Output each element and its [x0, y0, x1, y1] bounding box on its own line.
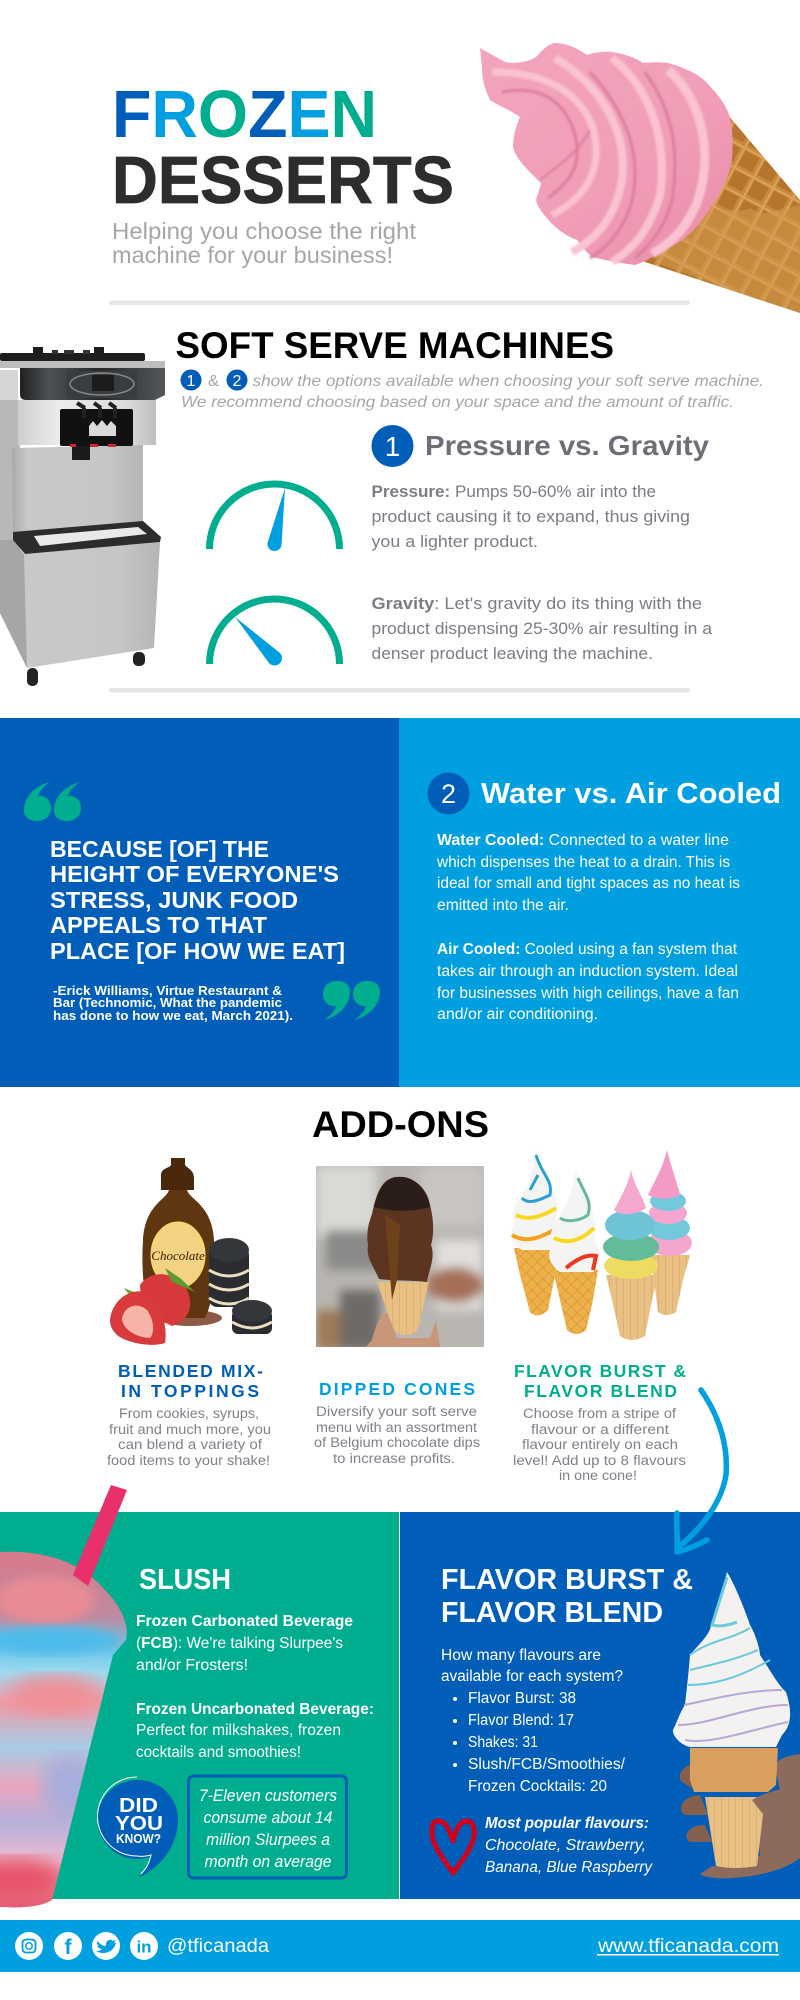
quote attribution: has done to how we eat, March 2021).	[53, 1009, 293, 1023]
subtitle: Helping you choose the right	[112, 218, 417, 244]
heading: Water vs. Air Cooled	[428, 772, 781, 814]
column: blended mix-in toppings: can blend a variety of	[118, 1437, 262, 1452]
column: blended mix-in toppings: IN TOPPINGS	[121, 1381, 259, 1401]
column: dipped cones: to increase profits.	[333, 1451, 455, 1466]
icon: instagram	[15, 1932, 43, 1960]
column: dipped cones: menu with an assortment	[316, 1420, 477, 1435]
text: air cooled: takes air through an induction system. Ideal	[437, 963, 738, 980]
section 1 heading: Pressure vs. Gravity: Pressure vs. Gravity	[425, 430, 709, 461]
section 1 heading: Pressure vs. Gravity: 1	[385, 431, 400, 462]
text: flavours per system: Flavor Burst: 38	[468, 1690, 576, 1707]
title: Frozen Desserts: DESSERTS	[112, 143, 454, 218]
text: slush descriptions: Frozen Carbonated Beverage	[136, 1613, 353, 1630]
quote text: PLACE [OF HOW WE EAT]	[50, 938, 345, 964]
heading: Flavor Burst & Flavor Blend	[441, 1564, 693, 1629]
text: gravity	[372, 595, 713, 663]
column: flavor burst and flavor blend: in one cone!	[559, 1468, 637, 1483]
heading: Flavor Burst & Flavor Blend: FLAVOR BURST &	[441, 1564, 693, 1596]
heading: Soft Serve Machines: SOFT SERVE MACHINES	[176, 325, 614, 366]
badge: did you know	[97, 1777, 178, 1877]
text: gravity: Gravity : Let's gravity do its thing with the	[372, 595, 702, 613]
callout: 7-Eleven fact: consume about 14	[204, 1809, 332, 1827]
callout: 7-Eleven fact: month on average	[204, 1853, 332, 1871]
panel: water vs air cooled	[399, 718, 800, 1087]
column: flavor burst and flavor blend: flavour or a different	[531, 1422, 669, 1437]
heading: Add-ons: ADD-ONS	[312, 1104, 489, 1145]
text: flavours per system: How many flavours are	[441, 1647, 601, 1664]
column: blended mix-in toppings	[107, 1361, 271, 1468]
footer bar	[0, 1920, 800, 1972]
column: flavor burst and flavor blend: level! Add up to 8 flavours	[513, 1453, 686, 1468]
text: flavours per system: available for each system?	[441, 1668, 623, 1685]
intro text with number badges: 1	[187, 373, 196, 390]
quote text	[50, 836, 345, 964]
text: most popular flavours: Chocolate, Strawberry,	[485, 1837, 646, 1854]
column: flavor burst and flavor blend: Choose from a stripe of	[523, 1406, 676, 1421]
text: flavours per system: Shakes: 31	[468, 1734, 538, 1751]
text: slush descriptions: Frozen Uncarbonated Beverage:	[136, 1701, 374, 1718]
quote attribution: -Erick Williams, Virtue Restaurant &	[53, 984, 282, 998]
panel: flavor burst and flavor blend	[400, 1512, 800, 1899]
divider	[109, 688, 690, 692]
text: water cooled: Water Cooled: Connected to a water line	[437, 832, 729, 849]
text: water cooled: which dispenses the heat to a drain. This is	[436, 854, 730, 871]
quote text: STRESS, JUNK FOOD	[50, 887, 298, 913]
text: water cooled: emitted into the air.	[437, 897, 569, 914]
text: pressure	[372, 483, 690, 551]
quote attribution: Bar (Technomic, What the pandemic	[53, 996, 282, 1010]
text: flavours per system: Slush/FCB/Smoothies/	[468, 1756, 626, 1773]
cone: rainbow pastel front	[603, 1170, 659, 1340]
column: dipped cones: of Belgium chocolate dips	[314, 1435, 480, 1450]
text: air cooled	[437, 941, 739, 1023]
column: flavor burst and flavor blend	[513, 1361, 686, 1483]
badge: did you know: YOU	[115, 1813, 163, 1835]
callout: 7-Eleven fact: 7-Eleven customers	[199, 1787, 337, 1805]
text: slush descriptions: Perfect for milkshakes, frozen	[136, 1722, 341, 1739]
panel: slush	[0, 1485, 399, 1907]
website: www.tficanada.com	[597, 1936, 779, 1957]
icon: facebook	[54, 1932, 82, 1960]
heading: Water vs. Air Cooled: Water vs. Air Cooled	[481, 778, 781, 810]
text: most popular flavours: Most popular flavours:	[485, 1815, 649, 1832]
text: slush descriptions: and/or Frosters!	[136, 1657, 248, 1674]
image: slush cup with straw	[0, 1485, 127, 1907]
intro text with number badges: We recommend choosing based on your space and the amount of traffic.	[181, 394, 734, 411]
column: flavor burst and flavor blend: FLAVOR BURST &	[514, 1361, 686, 1381]
text: slush descriptions: cocktails and smoothies!	[136, 1744, 301, 1761]
cone: rainbow stripe front	[549, 1170, 600, 1334]
column: blended mix-in toppings: BLENDED MIX-	[118, 1361, 263, 1381]
text: water cooled	[436, 832, 740, 914]
social handle: @tficanada	[167, 1936, 269, 1957]
text: slush descriptions	[136, 1613, 374, 1761]
callout: 7-Eleven fact	[188, 1776, 346, 1878]
title: Frozen Desserts: FROZEN	[112, 77, 377, 152]
column: blended mix-in toppings: fruit and much more, you	[109, 1422, 271, 1437]
column: flavor burst and flavor blend: FLAVOR BLEND	[524, 1381, 677, 1401]
icon: heart	[432, 1821, 474, 1873]
divider	[109, 300, 690, 305]
section 1 heading: Pressure vs. Gravity	[372, 425, 709, 467]
gauge: pressure	[210, 484, 340, 551]
quote text: HEIGHT OF EVERYONE'S	[50, 861, 339, 887]
heading: Flavor Burst & Flavor Blend: FLAVOR BLEND	[441, 1597, 663, 1629]
text: gravity: denser product leaving the machine.	[372, 645, 653, 663]
title: Frozen Desserts	[112, 77, 454, 218]
intro text with number badges: 2	[233, 373, 242, 390]
text: flavours per system: Frozen Cocktails: 20	[468, 1778, 607, 1795]
text: most popular flavours	[485, 1815, 653, 1876]
text: air cooled: for businesses with high ceilings, have a fan	[437, 985, 739, 1002]
intro text with number badges: show the options available when choosing your soft serve machine.	[252, 373, 764, 390]
text: most popular flavours: Banana, Blue Raspberry	[485, 1859, 653, 1876]
text: slush descriptions: (FCB): We're talking Slurpee's	[136, 1635, 343, 1652]
column: blended mix-in toppings: From cookies, syrups,	[119, 1406, 259, 1421]
text: pressure: Pressure: Pumps 50-60% air into the	[372, 483, 656, 501]
badge: did you know: KNOW?	[116, 1831, 161, 1846]
text: pressure: product causing it to expand, thus giving	[372, 508, 690, 526]
text: water cooled: ideal for small and tight spaces as no heat is	[437, 875, 740, 892]
icon: linkedin: in	[136, 1938, 152, 1956]
image: flavor burst cones	[511, 1150, 692, 1340]
badge: did you know: DID	[119, 1795, 158, 1817]
illustration: chocolate syrup, strawberries and cookies: Chocolate	[151, 1248, 205, 1263]
photo: dipped chocolate cone	[316, 1166, 484, 1350]
icon: opening quote mark	[24, 782, 81, 821]
column: flavor burst and flavor blend: flavour entirely on each	[522, 1437, 678, 1452]
heading: Slush: SLUSH	[139, 1564, 231, 1596]
text: air cooled: Air Cooled: Cooled using a fan system that	[437, 941, 738, 958]
icon: twitter	[92, 1932, 120, 1960]
column: blended mix-in toppings: food items to your shake!	[107, 1453, 270, 1468]
image: swirl cone held in a hand	[673, 1572, 800, 1878]
text: flavours per system	[441, 1647, 626, 1795]
text: pressure: you a lighter product.	[372, 533, 538, 551]
text: gravity: product dispensing 25-30% air resulting in a	[372, 620, 713, 638]
cone: rainbow stripe back	[511, 1150, 562, 1316]
gauge: gravity	[210, 599, 340, 665]
icon: facebook: f	[64, 1936, 72, 1959]
icon: linkedin	[130, 1932, 158, 1960]
intro text with number badges	[180, 370, 764, 411]
image: pink soft serve in waffle cone	[480, 43, 800, 313]
quote attribution	[53, 984, 293, 1023]
subtitle	[112, 218, 417, 268]
panel: quote	[0, 718, 399, 1087]
column: dipped cones	[314, 1379, 480, 1466]
quote text: BECAUSE [OF] THE	[50, 836, 269, 862]
subtitle: machine for your business!	[112, 242, 393, 268]
text: air cooled: and/or air conditioning.	[437, 1006, 598, 1023]
callout: 7-Eleven fact: million Slurpees a	[206, 1831, 330, 1849]
heading: Water vs. Air Cooled: 2	[441, 779, 456, 809]
column: dipped cones: Diversify your soft serve	[316, 1404, 477, 1419]
arrow: curved pointer to flavor panel	[677, 1390, 726, 1552]
cone: pink and blue back	[648, 1150, 692, 1315]
text: flavours per system: Flavor Blend: 17	[468, 1712, 574, 1729]
column: dipped cones: DIPPED CONES	[319, 1379, 475, 1399]
quote text: APPEALS TO THAT	[50, 912, 267, 938]
illustration: chocolate syrup, strawberries and cookies	[110, 1158, 272, 1345]
intro text with number badges: &	[208, 373, 219, 390]
icon: closing quote mark	[323, 981, 380, 1020]
image: soft serve machine	[0, 347, 165, 686]
